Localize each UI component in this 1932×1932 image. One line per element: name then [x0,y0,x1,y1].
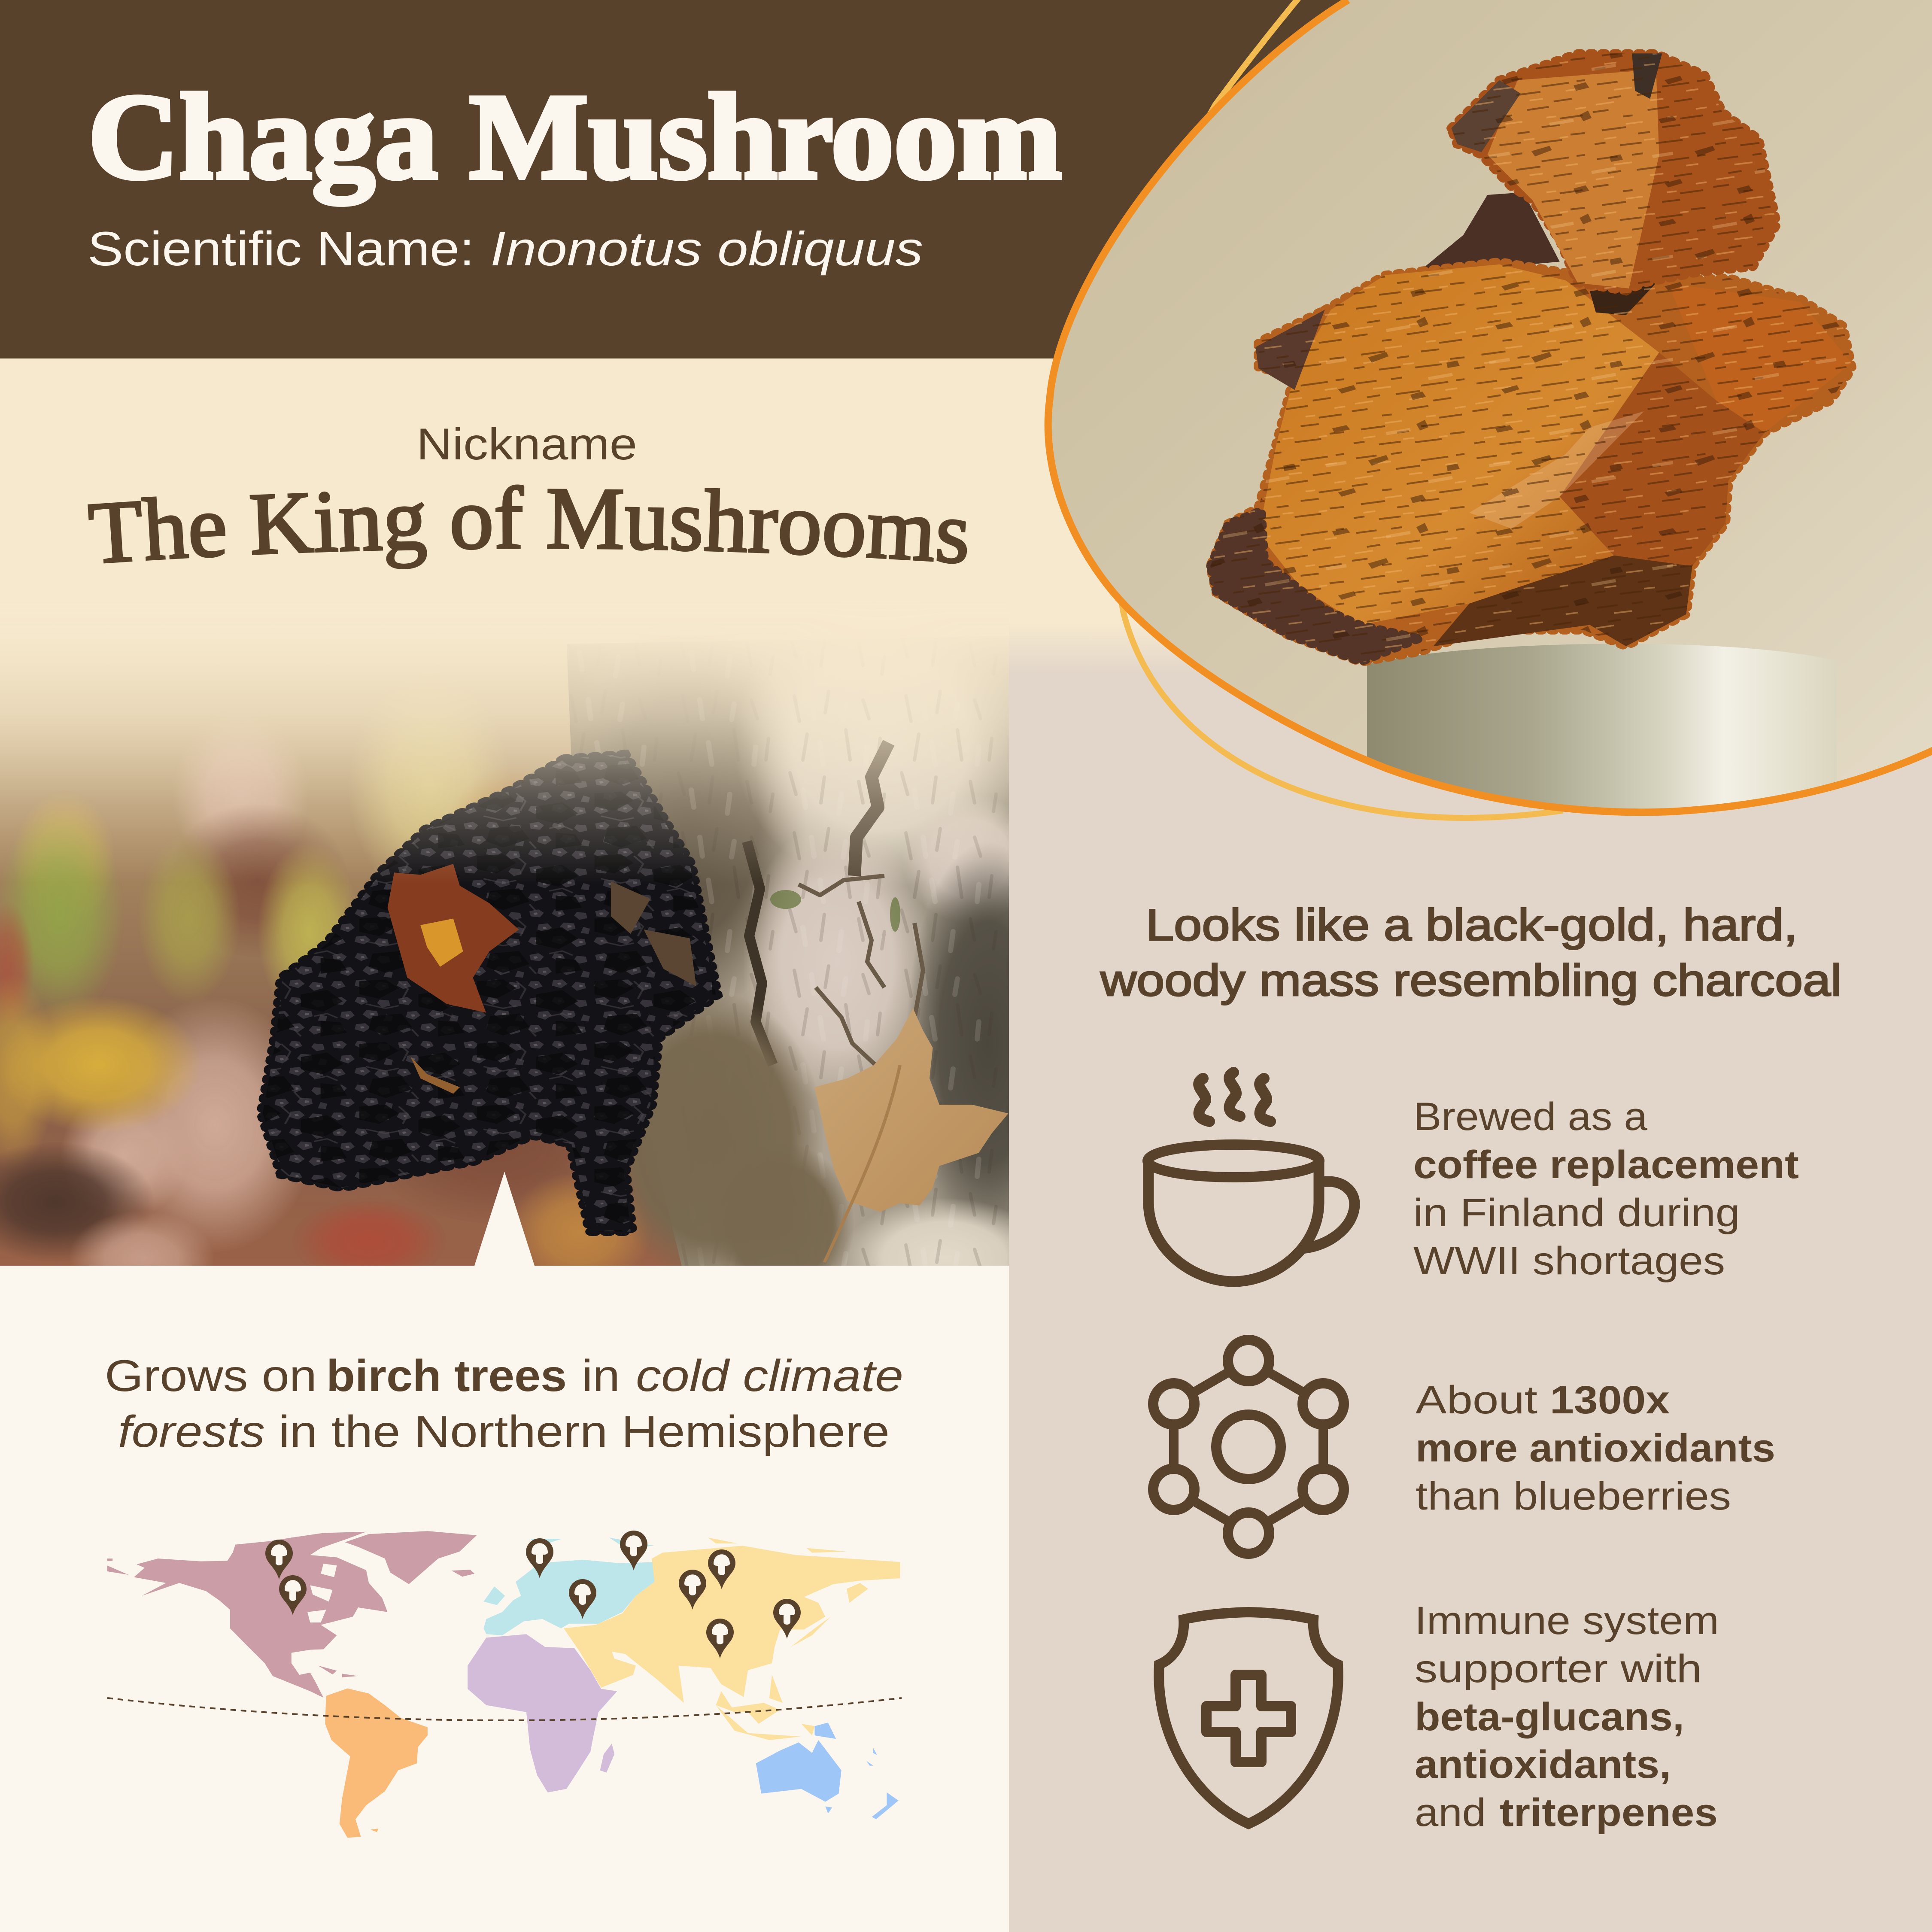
forest habitat text [105,1351,903,1457]
continent: Africa [468,1634,617,1792]
body: antioxidants: more antioxidants [1416,1426,1775,1470]
chaga conk [263,754,716,1232]
body: coffee replacement: in Finland during [1413,1191,1740,1235]
scientific name: Inonotus obliquus [490,222,923,276]
continent: Europe [483,1537,656,1635]
forest habitat text: cold climate [636,1351,903,1401]
forest habitat text: in the Northern Hemisphere [279,1407,890,1457]
body: immune support: supporter with [1415,1647,1702,1691]
map pins [265,1531,801,1659]
scientific name [88,222,923,276]
nickname label: Nickname [416,419,637,469]
appearance heading [1100,900,1842,1005]
body: antioxidants: 1300x [1550,1378,1670,1422]
body: coffee replacement: Brewed as a [1413,1095,1648,1139]
body: antioxidants: About [1416,1378,1537,1422]
yellow accent curve [1115,0,1563,818]
appearance heading: woody mass resembling charcoal [1100,956,1842,1005]
fallen leaf [814,1009,1009,1262]
blurred bracket [601,992,824,1284]
continent: Oceania [756,1722,899,1819]
body: antioxidants: than blueberries [1416,1474,1731,1518]
top fade into cream [0,601,1009,884]
body: coffee replacement [1413,1095,1799,1283]
pedestal [1367,644,1837,837]
blurred autumn forest background [0,727,641,1266]
rock grain overlay [1210,53,1852,662]
forest habitat text: Grows on [105,1351,317,1401]
body: immune support: and [1415,1791,1486,1835]
body: coffee replacement: WWII shortages [1413,1239,1725,1283]
forest habitat text: forests [118,1407,265,1457]
moss accents [770,890,900,932]
header band [0,0,1417,358]
scientific name: Scientific Name: [88,222,474,276]
chaga rock [1210,53,1852,662]
body: immune support: Immune system [1415,1599,1719,1643]
photo: chaga chunks on a pedestal in blob frame [1030,0,1932,837]
nickname heading, arched: The King of Mushrooms [86,469,974,583]
upper chunk [1451,53,1777,291]
panel: nickname cream background [0,358,1932,638]
orange blob outline [1048,0,1932,812]
birch bark [567,649,1009,1266]
world map [107,1531,902,1838]
forest habitat text: birch trees [326,1351,567,1401]
icon: antioxidant molecule [1153,1340,1344,1554]
body: immune support: antioxidants, [1415,1743,1671,1786]
body: immune support [1415,1599,1719,1835]
panel: right column beige [1009,623,1932,1932]
Hudson Bay and Great Lakes gaps [307,1564,337,1622]
photo: chaga growing on a birch tree [0,638,1009,1266]
body: antioxidants [1416,1378,1775,1518]
continent: South America [325,1689,428,1838]
body: coffee replacement: coffee replacement [1413,1143,1799,1187]
icon: shield with cross [1159,1612,1338,1824]
appearance heading: Looks like a black-gold, hard, [1146,900,1798,950]
icon: coffee cup with steam [1148,1072,1355,1282]
title: Chaga Mushroom [88,69,1062,207]
continent: Asia [564,1537,900,1740]
body: immune support: beta-glucans, [1415,1695,1684,1739]
speech pointer triangle [474,1172,535,1266]
equator dashed line [107,1698,902,1720]
body: immune support: triterpenes [1500,1791,1718,1835]
continent: North America [107,1531,477,1698]
forest habitat text: in [582,1351,620,1401]
